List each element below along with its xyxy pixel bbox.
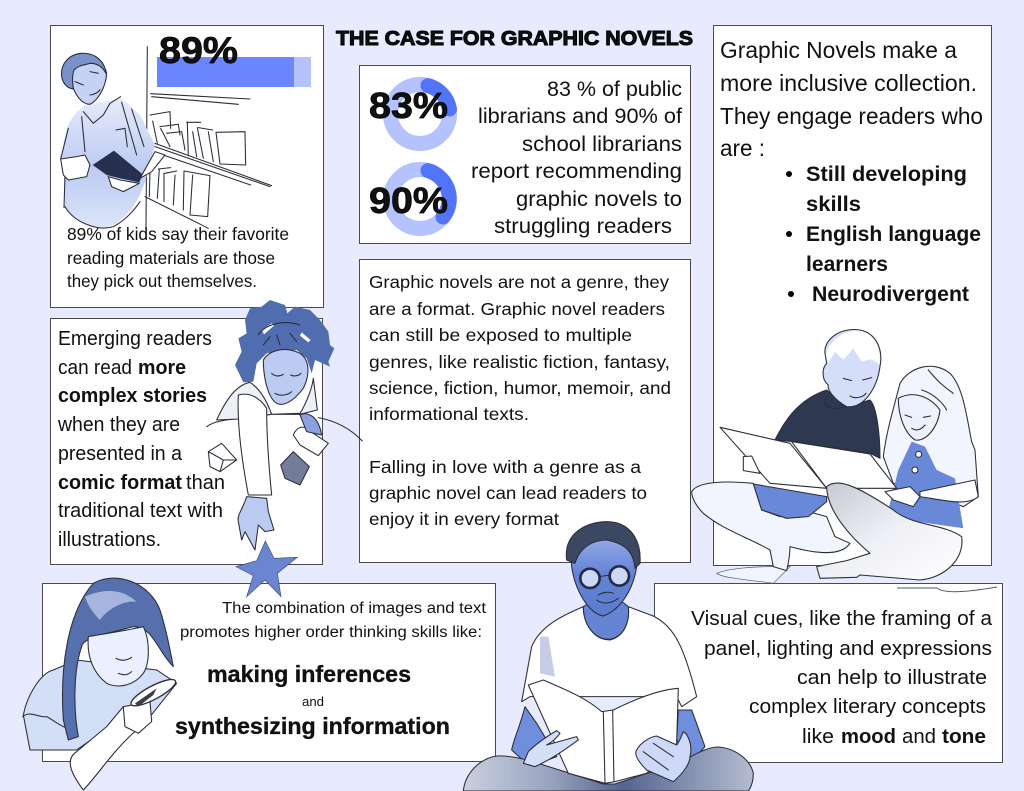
format text: can still be exposed to multiple	[369, 325, 632, 345]
emerging readers text: presented in a	[58, 443, 183, 465]
visual cues text: can help to illustrate	[797, 667, 987, 689]
format text: graphic novel can lead readers to	[369, 483, 647, 503]
thinking skills text: promotes higher order thinking skills like:	[180, 624, 482, 641]
bullet list: Neurodivergent	[812, 283, 969, 306]
visual cues text: panel, lighting and expressions	[704, 638, 992, 660]
visual cues text: Visual cues, like the framing of a	[691, 608, 993, 630]
thinking skills text	[175, 600, 487, 739]
visual cues text	[691, 608, 993, 748]
visual cues text: complex literary concepts	[749, 696, 986, 718]
format text: are a format. Graphic novel readers	[369, 299, 665, 319]
panel: kids choose their reading	[50, 26, 324, 308]
inclusive collection text	[720, 37, 983, 161]
emerging readers text: comic format	[58, 472, 182, 494]
panel: inclusive collection	[692, 26, 992, 583]
emerging readers text	[57, 328, 225, 551]
bullet list: learners	[806, 253, 888, 276]
format text: Falling in love with a genre as a	[369, 457, 641, 477]
visual cues text: like	[802, 726, 834, 748]
donut chart: 90 percent: 90%	[369, 180, 448, 221]
panel: higher order thinking	[23, 578, 495, 790]
statistics text: 83 % of public	[547, 78, 682, 101]
inclusive collection text: Graphic Novels make a	[720, 37, 957, 63]
bullet list	[786, 163, 981, 306]
format text: informational texts.	[369, 404, 529, 424]
statistics text: graphic novels to	[516, 188, 682, 211]
bullet list: Still developing	[806, 163, 967, 186]
format text: Graphic novels are not a genre, they	[369, 272, 669, 292]
thinking skills text: synthesizing information	[175, 713, 450, 739]
panel: format not genre	[360, 260, 690, 562]
visual cues text: mood	[841, 726, 896, 748]
donut chart: 83 percent: 83%	[369, 85, 448, 126]
emerging readers text: more	[138, 357, 186, 379]
thinking skills text: The combination of images and text	[222, 600, 487, 617]
big number 89%: 89%	[159, 30, 238, 71]
inclusive collection text: more inclusive collection.	[720, 70, 977, 96]
emerging readers text: can read	[58, 357, 132, 379]
panel: librarian statistics	[360, 66, 690, 244]
statistics text: struggling readers	[494, 215, 672, 238]
illustration: two kids reading together	[692, 329, 978, 583]
inclusive collection text: are :	[720, 135, 765, 161]
bullet list: English language	[806, 223, 981, 246]
emerging readers text: when they are	[57, 414, 180, 436]
emerging readers text: illustrations.	[58, 529, 161, 551]
caption: reading materials are those	[67, 248, 275, 268]
statistics text: librarians and 90% of	[478, 105, 682, 128]
statistics text	[471, 78, 682, 238]
donut chart: 83 percent	[369, 84, 450, 144]
emerging readers text: complex stories	[58, 385, 207, 407]
caption	[67, 224, 289, 291]
format text: science, fiction, humor, memoir, and	[369, 378, 671, 398]
inclusive collection text: They engage readers who	[720, 103, 983, 129]
format text: enjoy it in every format	[369, 509, 559, 529]
panel: visual cues	[654, 584, 1002, 762]
thinking skills text: making inferences	[207, 661, 411, 687]
title: THE CASE FOR GRAPHIC NOVELS	[336, 28, 693, 50]
statistics text: school librarians	[522, 133, 682, 156]
caption: they pick out themselves.	[67, 271, 257, 291]
statistics text: report recommending	[471, 160, 682, 183]
visual cues text: and	[902, 726, 936, 748]
bullet list: skills	[806, 193, 861, 216]
format text	[369, 272, 671, 529]
format text: genres, like realistic fiction, fantasy,	[369, 352, 670, 372]
emerging readers text: than	[186, 472, 225, 494]
bar chart: 89 percent	[157, 57, 311, 87]
illustration: boy with glasses reading a book	[463, 522, 753, 791]
illustration: girl with magnifying glass	[23, 578, 179, 790]
visual cues text: tone	[942, 726, 986, 748]
panel: emerging readers	[50, 300, 362, 597]
illustration: girl with building blocks and star	[207, 300, 362, 597]
pen stroke	[897, 587, 997, 592]
illustration: boy reading at bookshelf	[61, 47, 272, 228]
emerging readers text: Emerging readers	[58, 328, 212, 350]
donut chart: 90 percent	[369, 170, 450, 228]
caption: 89% of kids say their favorite	[67, 224, 289, 244]
emerging readers text: traditional text with	[58, 500, 223, 522]
thinking skills text: and	[302, 694, 324, 709]
